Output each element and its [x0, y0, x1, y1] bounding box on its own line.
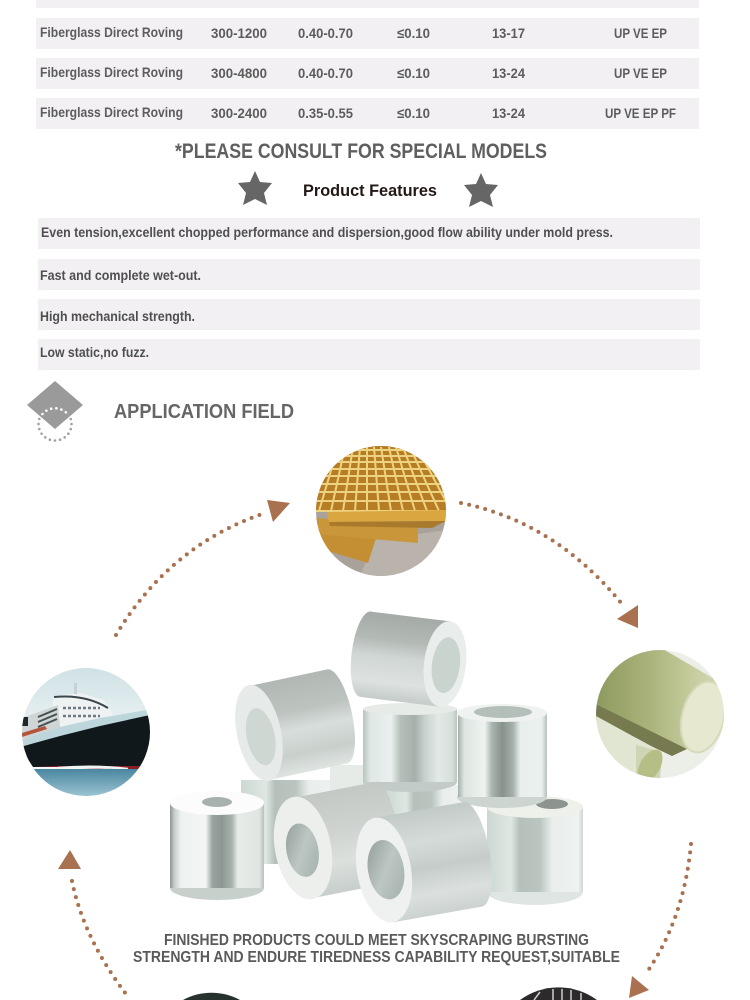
roll: back left [241, 765, 380, 864]
panel: specification table rows: 0.40-0.70 [298, 25, 353, 41]
photo: fiberglass grating circle [316, 446, 446, 576]
panel: specification table rows: 13-17 [492, 25, 525, 41]
panel: specification table rows: Fiberglass Direct Roving [40, 24, 183, 40]
roll: right vertical [457, 704, 547, 808]
photo: fiberglass pipes circle [596, 650, 724, 778]
panel: specification table rows: ≤0.10 [397, 105, 430, 121]
panel: product features list: Even tension,excellent chopped performance and dispersion,good flow ability under mold press. [41, 225, 613, 240]
panel: product features list: Low static,no fuzz. [40, 345, 149, 360]
arrow: ship to grating [116, 500, 290, 635]
photo: fiberglass roving rolls [170, 610, 583, 927]
panel: specification table rows: Fiberglass Direct Roving [40, 104, 183, 120]
panel: specification table rows: ≤0.10 [397, 65, 430, 81]
panel: specification table rows: ≤0.10 [397, 25, 430, 41]
roll: left tilted [227, 665, 362, 786]
icon: diamond with dotted ring [27, 381, 83, 440]
photo: lower right circle [520, 987, 597, 1000]
roll: front tilted [348, 799, 499, 927]
panel: product features list: High mechanical strength. [40, 309, 195, 324]
arrow: grating to pipes [461, 503, 638, 628]
panel: specification table rows: UP VE EP PF [605, 105, 676, 121]
panel: specification table rows: 300-4800 [211, 65, 267, 81]
panel: specification table rows: 0.40-0.70 [298, 65, 353, 81]
text: finished products description: FINISHED PRODUCTS COULD MEET SKYSCRAPING BURSTING [164, 932, 589, 949]
arrow: lower left to ship [58, 850, 129, 998]
roll: top tilted [346, 610, 471, 709]
roll: back middle [385, 785, 470, 817]
panel: product features list [38, 218, 700, 370]
panel: specification table rows: Fiberglass Direct Roving [40, 64, 183, 80]
panel: specification table rows: UP VE EP [614, 25, 667, 41]
panel: specification table rows: 13-24 [492, 105, 525, 121]
panel: specification table rows: UP VE EP [614, 65, 667, 81]
text: finished products description [133, 932, 620, 966]
photo: cruise ship circle [20, 667, 152, 799]
text: finished products description: STRENGTH AND ENDURE TIREDNESS CAPABILITY REQUEST,SUITABLE [133, 949, 620, 966]
heading: special models notice: *PLEASE CONSULT FOR SPECIAL MODELS [175, 140, 547, 163]
heading: product features: Product Features [303, 181, 437, 200]
panel: specification table rows [36, 0, 699, 129]
heading: application field: APPLICATION FIELD [114, 400, 294, 423]
icon: left star [238, 171, 272, 205]
icon: right star [464, 173, 498, 207]
panel: specification table rows: 300-2400 [211, 105, 267, 121]
panel: product features list: Fast and complete wet-out. [40, 268, 201, 283]
panel: specification table rows: 0.35-0.55 [298, 105, 353, 121]
roll: back right [487, 796, 583, 905]
panel: specification table rows: 13-24 [492, 65, 525, 81]
arrow: pipes to lower right [629, 844, 691, 998]
roll: center left tilted [266, 778, 408, 904]
panel: specification table rows: 300-1200 [211, 25, 267, 41]
roll: bottom left vertical [170, 791, 264, 900]
roll: upper center vertical [363, 703, 457, 792]
photo: lower left circle [183, 993, 240, 1000]
